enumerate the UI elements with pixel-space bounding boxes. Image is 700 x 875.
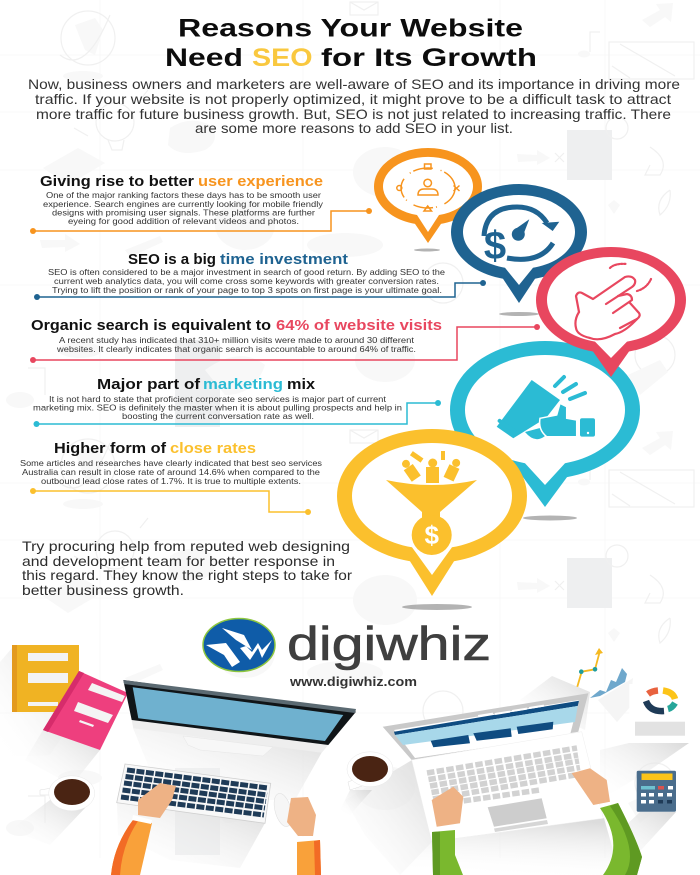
pin: cyan marketing <box>450 341 640 507</box>
heading: user experience: user experience <box>198 174 323 190</box>
closing call to action: this regard. They know the right steps to take for <box>22 568 352 583</box>
coffee cup right <box>347 752 393 790</box>
yellow book <box>12 645 79 712</box>
pink book <box>43 671 128 750</box>
heading: time investment: time investment <box>220 252 348 268</box>
icon: dollar and clock arrow: $ <box>484 224 506 268</box>
calculator <box>637 771 676 812</box>
title: Need <box>165 44 243 72</box>
connector: yellow <box>30 488 311 515</box>
pin: orange user experience <box>374 148 482 243</box>
intro paragraph: are some more reasons to add SEO in your list. <box>195 120 513 136</box>
closing call to action: better business growth. <box>22 583 184 598</box>
intro paragraph: Now, business owners and marketers are well-aware of SEO and its importance in driving more <box>28 76 680 92</box>
section: organic search <box>30 318 540 363</box>
body text: marketing mix: It is not hard to state that proficient corporate seo services is major part of current <box>49 394 387 404</box>
heading: organic search: Organic search is equivalent to <box>31 318 271 334</box>
body text: marketing mix: boosting the current conversation rate as well. <box>122 411 314 421</box>
heading: organic search: 64% of website visits <box>276 318 442 334</box>
laptop hands and green sleeves <box>432 768 642 875</box>
logo emblem <box>203 618 275 672</box>
heading: close rates <box>54 441 256 457</box>
heading: close rates: close rates <box>170 441 256 457</box>
heading: marketing mix: mix <box>287 377 315 393</box>
body text: close rates <box>20 458 323 486</box>
connector: red <box>30 324 540 363</box>
body text: time investment: Trying to lift the position or rank of your page to top 3 spots on first page is your ultimate goal. <box>52 285 442 295</box>
heading: marketing mix: marketing <box>203 377 283 393</box>
section: time investment <box>34 252 486 300</box>
coffee cup left <box>40 776 95 811</box>
pin: red organic search <box>536 247 686 377</box>
connector: orange <box>30 208 372 234</box>
heading: marketing mix <box>97 377 315 393</box>
icon: tapping hand <box>575 264 651 339</box>
title: SEO <box>252 44 312 72</box>
body text: organic search <box>56 335 416 354</box>
long shadows <box>340 676 689 875</box>
section: user experience <box>30 174 372 234</box>
heading: user experience: Giving rise to better <box>40 174 194 190</box>
icon: funnel and dollar: $ <box>424 520 439 550</box>
body text: user experience: One of the major ranking factors these days has to be smooth user <box>46 190 321 200</box>
intro paragraph: more traffic for future business growth. But, SEO is not just related to increasing traffic. There <box>36 106 671 122</box>
pin shadows <box>402 248 577 610</box>
closing call to action <box>22 539 352 598</box>
pin: blue time investment <box>451 184 587 303</box>
title <box>165 14 537 72</box>
body text: marketing mix: marketing mix. SEO is definitely the master when it is about pulling prospects and help in <box>33 402 402 412</box>
keyboard <box>117 764 271 823</box>
body text: time investment <box>48 267 445 295</box>
heading: time investment: SEO is a big <box>128 252 216 268</box>
section: marketing mix <box>33 377 441 427</box>
desk illustration: left workstation <box>0 645 356 875</box>
closing call to action: and development team for better response in <box>22 554 335 569</box>
icon: funnel and dollar <box>386 451 477 555</box>
website url: www.digiwhiz.com <box>289 674 417 689</box>
title: Reasons Your Website <box>178 14 523 42</box>
icon: user with target ring <box>397 164 460 211</box>
intro paragraph <box>28 76 680 136</box>
closing call to action: Try procuring help from reputed web designing <box>22 539 350 554</box>
heading: close rates: Higher form of <box>54 441 166 457</box>
body text: user experience: experience. Search engines are currently looking for mobile friendly <box>43 199 324 209</box>
body text: user experience: designs with promising user signals. These platforms are further <box>52 208 315 218</box>
monitor <box>123 680 356 756</box>
heading: organic search <box>31 318 442 334</box>
body text: close rates: outbound lead close rates of 1.7%. It is true to multiple extents. <box>41 476 301 486</box>
laptop <box>383 693 603 842</box>
desk illustration: right workstation <box>340 648 700 875</box>
document with donut chart <box>629 684 700 743</box>
body text: organic search: websites. It clearly indicates that organic search is accountable to around 64% of traffic. <box>56 344 416 354</box>
title: for Its Growth <box>321 44 537 72</box>
growth chart papers <box>577 648 633 722</box>
connector: cyan <box>34 400 441 427</box>
logo: digiwhiz: digiwhiz <box>287 617 491 670</box>
body text: close rates: Australia can result in close rate of around 14.6% when compared to the <box>22 467 320 477</box>
connector: blue <box>34 280 486 300</box>
mouse and right hand with orange sleeve <box>271 792 321 875</box>
pin: yellow close rates <box>337 429 527 596</box>
heading: time investment <box>128 252 348 268</box>
body text: close rates: Some articles and researches have clearly indicated that best seo services <box>20 458 323 468</box>
intro paragraph: traffic. If your website is not properly optimized, it might prove to be a difficult task to attract <box>35 91 671 107</box>
body text: organic search: A recent study has indicated that 310+ million visits were made to around 30 different <box>59 335 415 345</box>
body text: marketing mix <box>33 394 402 421</box>
body text: user experience <box>43 190 324 226</box>
icon: megaphone, thumb and phone <box>497 377 595 439</box>
body text: time investment: current web analytics data, you will come cross some keywords with greater conversion rates. <box>54 276 439 286</box>
logo: digiwhiz <box>203 617 491 689</box>
heading: marketing mix: Major part of <box>97 377 200 393</box>
body text: user experience: eyeing for good addition of relevant videos and photos. <box>68 216 299 226</box>
left hand and orange sleeve <box>111 783 176 875</box>
section: close rates <box>20 441 323 515</box>
long shadows <box>0 648 322 868</box>
body text: time investment: SEO is often considered to be a major investment in search of good return. By adding SEO to the <box>48 267 445 277</box>
heading: user experience <box>40 174 323 190</box>
